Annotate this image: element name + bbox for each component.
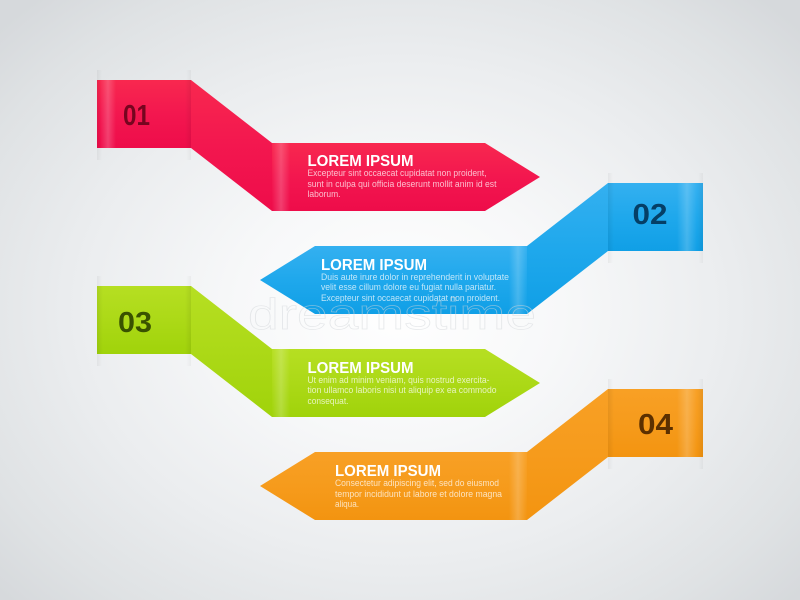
body text 04: Consectetur adipiscing elit, sed do eiusmod [335, 478, 499, 488]
panel: step 01 red ribbon [97, 70, 540, 211]
ribbon fold band 01 [191, 80, 272, 211]
number tab 03 [97, 286, 191, 354]
panel: step 02 blue ribbon [260, 173, 703, 314]
heading 04: LOREM IPSUM [335, 463, 441, 480]
heading 01: LOREM IPSUM [308, 153, 414, 170]
body text 02: velit esse cillum dolore eu fugiat nulla pariatur. [321, 282, 496, 292]
arrow body 04 [260, 452, 527, 520]
body text 03: consequat. [308, 396, 348, 406]
body text 04: aliqua. [335, 499, 359, 509]
number tab 01 [97, 80, 191, 148]
body text 01: Excepteur sint occaecat cupidatat non proident, [308, 168, 486, 178]
body text 03: Ut enim ad minim veniam, quis nostrud exercita- [308, 375, 490, 385]
ribbon fold band 03 [191, 286, 272, 417]
number 01: 01 [123, 100, 150, 132]
body text 01: sunt in culpa qui officia deserunt mollit anim id est [308, 179, 497, 189]
number tab 04 [608, 389, 703, 457]
arrow body 01 [272, 143, 540, 211]
arrow body 02 [260, 246, 527, 314]
ribbon fold band 04 [527, 389, 608, 520]
number 04: 04 [638, 409, 673, 441]
body text 02: Duis aute irure dolor in reprehenderit in voluptate [321, 272, 509, 282]
heading 02: LOREM IPSUM [321, 257, 427, 274]
arrow body 03 [272, 349, 540, 417]
body text 02: Excepteur sint occaecat cupidatat non proident. [321, 293, 500, 303]
number 02: 02 [632, 199, 668, 231]
body text 04: tempor incididunt ut labore et dolore magna [335, 489, 502, 499]
number tab 02 [608, 183, 703, 251]
panel: step 04 orange ribbon [260, 379, 703, 520]
number 03: 03 [118, 307, 152, 339]
watermark: dreamstime [248, 290, 536, 339]
body text 03: tion ullamco laboris nisi ut aliquip ex ea commodo [308, 385, 496, 395]
body text 01: laborum. [308, 189, 340, 199]
panel: step 03 green ribbon [97, 276, 540, 417]
ribbon fold band 02 [527, 183, 608, 314]
heading 03: LOREM IPSUM [308, 360, 414, 377]
